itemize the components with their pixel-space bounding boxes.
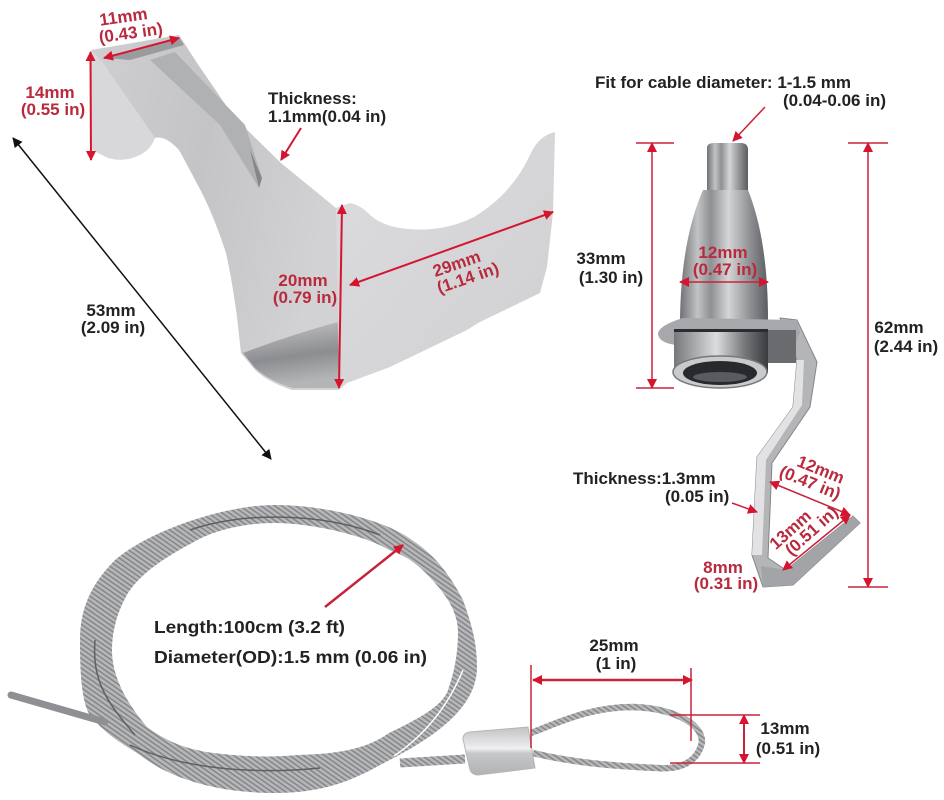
icon: metal hook: [91, 35, 555, 390]
label: hook width: 29mm: [430, 247, 483, 281]
label: cable diameter fit: Fit for cable diameter: 1-1.5 mm: [595, 73, 851, 92]
label: fastener diameter: (0.47 in): [693, 260, 757, 279]
icon: cable fastener: [658, 143, 860, 587]
label: loop height: 13mm: [760, 719, 810, 738]
label: overall hook length: 53mm: [86, 301, 136, 320]
label: hook thickness: Thickness:: [268, 89, 357, 108]
label: fastener thickness: Thickness:1.3mm: [573, 469, 716, 488]
label: hook width: (1.14 in): [434, 259, 501, 297]
label: fastener diameter: 12mm: [698, 243, 748, 262]
label: hook opening length: 13mm: [766, 506, 815, 553]
label: fastener total height: 62mm: [874, 318, 924, 337]
label: cable length and diameter: Diameter(OD):1.5 mm (0.06 in): [154, 647, 427, 667]
label: hook flap height: 14mm: [25, 83, 75, 102]
label: fastener body height: 33mm: [576, 249, 626, 268]
label: hook thickness: 1.1mm(0.04 in): [268, 107, 386, 126]
label: loop length: (1 in): [596, 654, 636, 673]
label: fastener body height: (1.30 in): [579, 268, 643, 287]
label: hook top width: (0.43 in): [98, 19, 164, 47]
label: cable diameter fit: (0.04-0.06 in): [783, 91, 886, 110]
dimension arrows: hook: [90, 38, 553, 388]
label: loop length: 25mm: [589, 636, 639, 655]
label: hook flap height: (0.55 in): [21, 100, 85, 119]
label: hook opening length: (0.51 in): [781, 502, 842, 560]
fastener arm: [752, 318, 860, 587]
label: fastener thickness: (0.05 in): [665, 487, 729, 506]
label: hook base: 8mm: [703, 558, 743, 577]
label: cable length and diameter: Length:100cm (3.2 ft): [154, 617, 345, 637]
dimension arrow: 53 mm overall length: [13, 138, 271, 459]
fastener cone: [680, 190, 768, 320]
label: hook base: (0.31 in): [694, 574, 758, 593]
label: overall hook length: (2.09 in): [81, 318, 145, 337]
icon: cable crimp sleeve: [463, 727, 535, 775]
fastener flange: [658, 318, 800, 346]
label: fastener total height: (2.44 in): [874, 337, 938, 356]
dimension arrows: fastener: [636, 107, 888, 587]
label: hook opening width: 12mm: [794, 452, 847, 488]
icon: steel wire cable: [11, 505, 702, 793]
label: loop height: (0.51 in): [756, 739, 820, 758]
label: hook opening width: (0.47 in): [777, 462, 843, 504]
label: hook height: (0.79 in): [273, 288, 337, 307]
label: hook top width: 11mm: [98, 4, 149, 30]
dimension arrows: cable: [325, 545, 760, 763]
label: hook height: 20mm: [278, 271, 328, 290]
fastener pin: [707, 143, 748, 192]
